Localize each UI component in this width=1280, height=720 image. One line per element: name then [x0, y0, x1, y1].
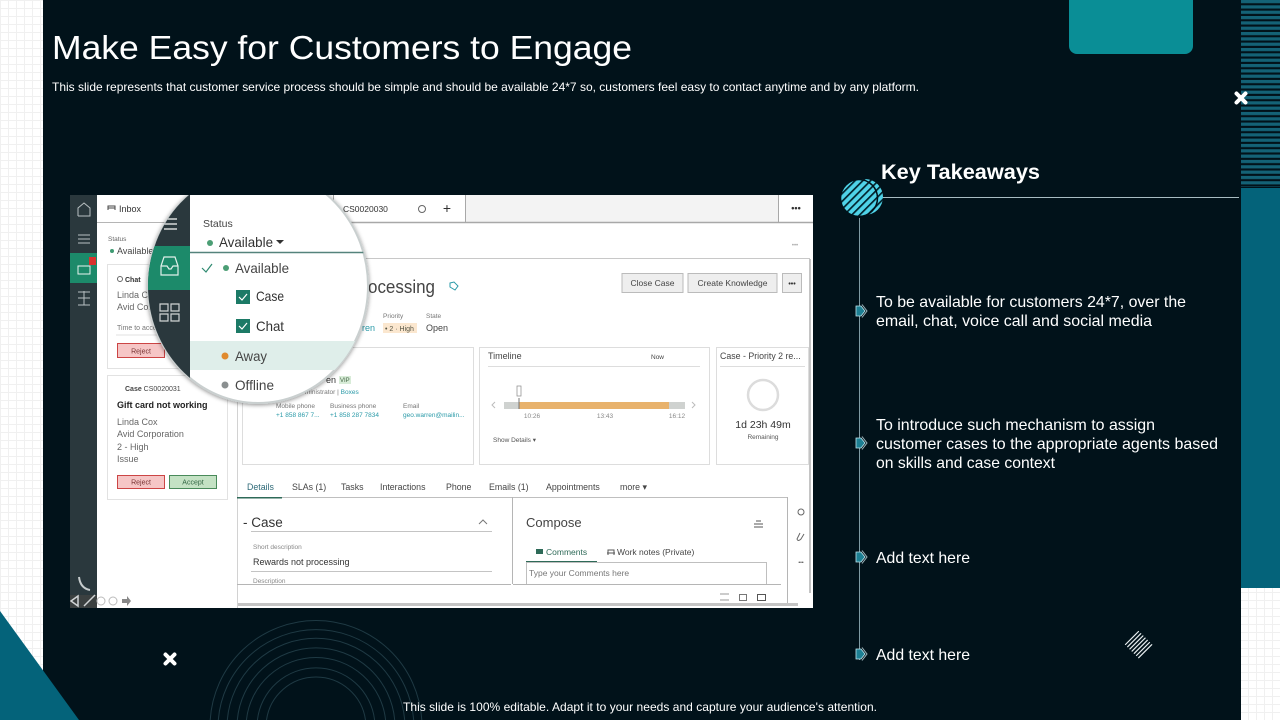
timeline card: Now [651, 354, 664, 361]
icon: marker 3 [856, 550, 867, 564]
timeline card: 16:12 [669, 413, 686, 420]
timeline card: Show Details ▾ [493, 437, 537, 444]
compose panel: Type your Comments here [529, 568, 629, 578]
inbox column: Gift card not working [117, 400, 208, 410]
timeline card: Timeline [488, 351, 522, 361]
contact card: geo.warren@mailin... [403, 412, 465, 419]
icon: marker 4 [856, 648, 867, 660]
case header: Close Case [631, 278, 675, 288]
inbox column: Case CS0020031 [125, 386, 181, 393]
magnifier lens: Away [235, 348, 267, 364]
case form: Short description [253, 544, 302, 551]
concentric arcs [210, 621, 422, 720]
case form: - Case [243, 515, 283, 530]
icon: marker 2 [856, 436, 867, 450]
icon: cross bottom left [166, 654, 174, 664]
magnifier lens: Chat [256, 318, 284, 334]
magnifier lens: Offline [235, 377, 274, 393]
inbox column: Issue [117, 454, 139, 464]
icon: hatched diamond [1126, 632, 1152, 658]
compose panel: Work notes (Private) [617, 547, 694, 557]
case header: Create Knowledge [698, 278, 768, 288]
priority card: 1d 23h 49m [735, 419, 791, 431]
magnifier lens [148, 169, 368, 403]
compose panel: ••• [798, 560, 804, 566]
case header: Priority [383, 313, 404, 320]
priority card: Case - Priority 2 re... [720, 351, 801, 361]
case header: State [426, 313, 442, 320]
compose panel: Comments [546, 547, 587, 557]
icon: striped ball [840, 179, 883, 216]
inbox column: Accept [182, 480, 204, 486]
detail tabs [237, 482, 787, 498]
detail tabs: Details [247, 482, 274, 492]
icon: marker 1 [856, 304, 867, 318]
inbox column: Avid Corporation [117, 429, 184, 439]
takeaway 2: To introduce such mechanism to assign [876, 417, 1155, 434]
case header: ren [362, 323, 375, 333]
takeaway 1: email, chat, voice call and social media [876, 313, 1152, 330]
inbox column: Available [117, 246, 153, 256]
inbox column: Time to accept [117, 325, 163, 332]
contact card: +1 858 867 7... [276, 412, 320, 419]
detail tabs: Appointments [546, 482, 600, 492]
timeline card: 13:43 [597, 413, 614, 420]
detail tabs: Interactions [380, 482, 426, 492]
takeaway 2: customer cases to the appropriate agents based [876, 436, 1218, 453]
corner triangle [0, 611, 79, 720]
magnifier lens: Case [256, 288, 284, 304]
right teal band [1241, 188, 1280, 588]
inbox column: Linda Cox [117, 290, 158, 300]
contact card: en [326, 375, 336, 385]
takeaway 1 [856, 294, 1186, 330]
tab bar: CS0020030 [343, 204, 388, 214]
case header: ocessing [368, 277, 435, 297]
detail tabs: SLAs (1) [292, 482, 326, 492]
contact card: VIP [340, 378, 350, 384]
heading rule [883, 196, 1239, 198]
contact card: Mobile phone [276, 403, 315, 410]
tab bar: ••• [792, 243, 798, 249]
contact card: ministrator | Boxes [305, 389, 359, 396]
subtitle: This slide represents that customer service process should be simple and should be available 24*7 so, customers feel easy to contact anytime and by any platform. [52, 80, 919, 94]
case header [362, 274, 802, 333]
case header: Open [426, 323, 448, 333]
inbox column: 2 - High [117, 442, 149, 452]
detail tabs: Tasks [341, 482, 364, 492]
compose panel [513, 509, 804, 602]
inbox column: Reject [131, 480, 151, 486]
case form: Description [253, 578, 286, 585]
magnifier lens: Available [235, 260, 289, 276]
magnifier lens: Status [203, 218, 233, 230]
detail tabs: Phone [446, 482, 472, 492]
compose panel: Compose [526, 515, 582, 530]
timeline line [858, 218, 860, 660]
inbox column [97, 206, 238, 608]
takeaway 2: on skills and case context [876, 455, 1056, 472]
inbox column: Status [108, 236, 127, 243]
detail tabs: more ▾ [620, 482, 647, 492]
contact card: Business phone [330, 403, 377, 410]
tab bar: ••• [791, 203, 801, 213]
inbox column: Chat [125, 277, 141, 284]
timeline card: 10:26 [524, 413, 541, 420]
icon: cross top right [1236, 94, 1246, 102]
inbox column: Reject [131, 348, 151, 356]
takeaway 4: Add text here [876, 647, 970, 664]
tab bar [333, 195, 813, 593]
detail tabs: Emails (1) [489, 482, 529, 492]
console nav rail [70, 195, 97, 608]
left grid strip [0, 0, 43, 720]
right stripe band [1241, 0, 1280, 187]
magnifier lens: Available [219, 234, 273, 250]
contact card: +1 858 287 7834 [330, 412, 379, 419]
contact card: Email [403, 403, 420, 410]
inbox column: Inbox [119, 204, 142, 214]
key takeaways heading: Key Takeaways [881, 161, 1040, 184]
priority card: Remaining [747, 434, 779, 441]
top teal tab [1069, 0, 1193, 54]
contact card [242, 348, 474, 464]
title: Make Easy for Customers to Engage [52, 29, 632, 66]
bottom toolbar icons [70, 595, 131, 608]
takeaway 2 [856, 417, 1218, 472]
right grid strip [1241, 588, 1280, 720]
tab bar: + [443, 200, 451, 216]
case header: • 2 · High [385, 326, 414, 333]
screenshot: customer service console [70, 169, 813, 608]
takeaway 3: Add text here [876, 550, 970, 567]
case form: Rewards not processing [253, 557, 350, 567]
case form [237, 497, 798, 606]
takeaway 1: To be available for customers 24*7, over the [876, 294, 1186, 311]
inbox column: Avid Corp [117, 302, 156, 312]
footer note: This slide is 100% editable. Adapt it to your needs and capture your audience's attention. [403, 700, 877, 714]
case header: ••• [788, 281, 796, 288]
priority card [716, 348, 808, 464]
timeline card [480, 348, 710, 464]
inbox column: Linda Cox [117, 417, 158, 427]
